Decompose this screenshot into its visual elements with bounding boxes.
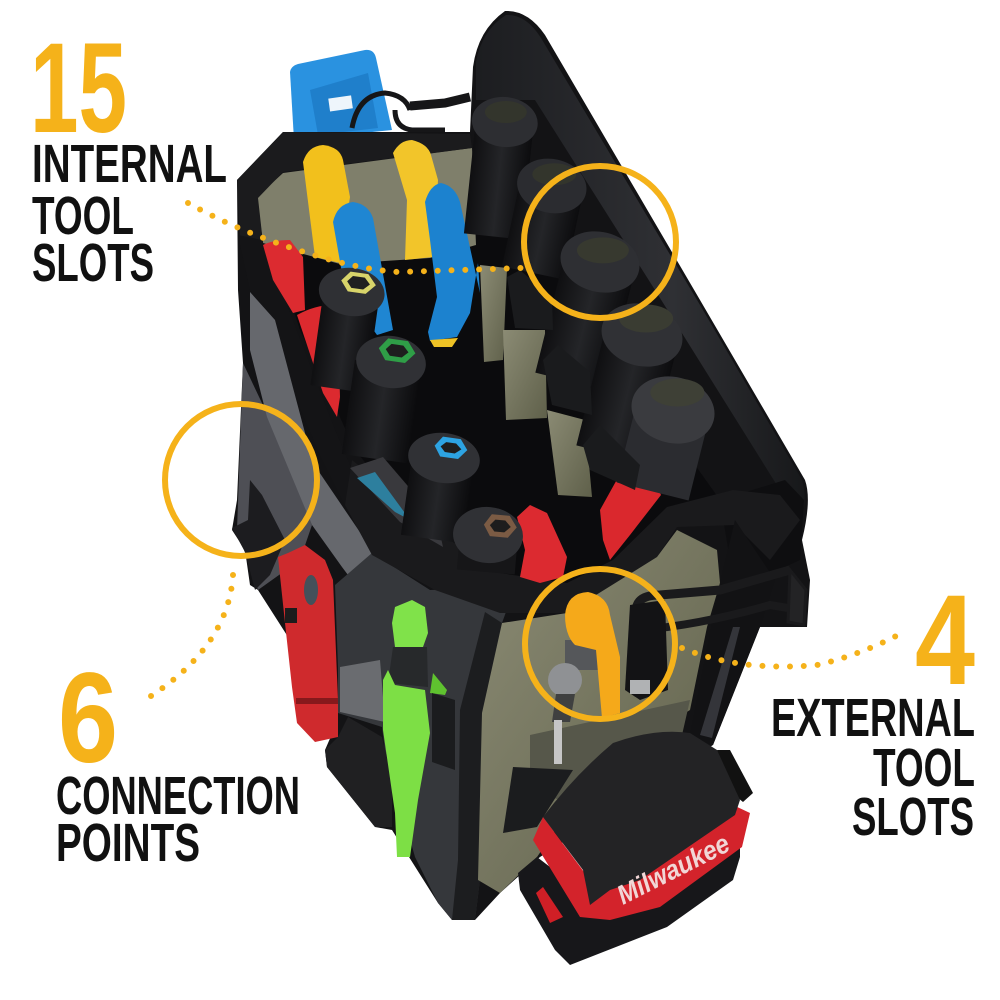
- mesh dark right band: [452, 612, 502, 920]
- top rim: [237, 132, 472, 243]
- back olive wall: [257, 148, 476, 264]
- left outer dark panel: [237, 363, 312, 590]
- olive inner pocket shade: [530, 700, 690, 800]
- interior: [258, 150, 720, 590]
- screwdriver 4: [572, 289, 691, 464]
- callout: 15 internal tool slots: TOOL: [32, 186, 134, 246]
- screwdriver 3: [531, 222, 646, 391]
- back flap: [476, 15, 805, 520]
- grey strap: [250, 292, 392, 607]
- tape side nub: [717, 750, 753, 802]
- olive tool pockets: [480, 265, 592, 497]
- icon: tape measure: [518, 732, 753, 965]
- icon: blue tool at top: [290, 50, 392, 140]
- bag body silhouette: [232, 11, 810, 920]
- screwdriver blue cap: [397, 428, 483, 544]
- screwdriver green cap: [342, 331, 429, 464]
- icon: red cutter: [278, 545, 338, 742]
- tool bag photo: [232, 11, 810, 920]
- icon: screwdrivers: [305, 94, 723, 575]
- callout: 4 external tool slots: 4: [915, 569, 975, 712]
- black pocket loops: [507, 270, 640, 490]
- icon: blue meter: [350, 457, 443, 547]
- screwdriver 1: [460, 94, 540, 240]
- callout: 6 connection points: 6: [58, 647, 118, 790]
- front mesh panel: [335, 553, 515, 920]
- screwdriver yellow cap: [305, 264, 388, 394]
- callout dots and circles: [140, 166, 898, 719]
- front lip: [345, 460, 800, 613]
- callout: 15 internal tool slots: 15: [30, 17, 127, 160]
- lower left buckle: [325, 717, 392, 827]
- icon: red handles: [263, 240, 661, 583]
- callout: 6 connection points: [56, 647, 300, 873]
- grey strap lower: [340, 660, 385, 722]
- screwdriver 2: [499, 152, 592, 280]
- screwdriver brown cap: [450, 504, 525, 575]
- flap side lower: [720, 480, 804, 590]
- callout: 6 connection points: CONNECTION: [56, 766, 300, 826]
- callout: 15 internal tool slots: INTERNAL: [32, 134, 227, 194]
- webbing strap: [503, 767, 573, 833]
- tape brand: Milwaukee: [612, 828, 734, 910]
- icon: green marker: [383, 600, 455, 857]
- tape top dome: [543, 732, 740, 905]
- carabiner right: [636, 570, 806, 630]
- icon: yellow pliers handles: [303, 140, 438, 263]
- callout: 15 internal tool slots: SLOTS: [32, 233, 154, 293]
- icon: blue pliers handles: [333, 183, 480, 347]
- black bag edge: [238, 235, 450, 570]
- tape base: [518, 830, 740, 965]
- callout: 4 external tool slots: [771, 569, 975, 847]
- upper left buckle: [232, 480, 285, 590]
- screwdriver 5: [612, 363, 723, 502]
- icon: carabiner ring and clip: [352, 93, 470, 130]
- tape red body: [533, 805, 750, 920]
- right side strips: [690, 520, 775, 745]
- tape red clip: [536, 887, 563, 923]
- icon: external pocket tools: [548, 592, 668, 764]
- callout: 15 internal tool slots: [30, 17, 227, 293]
- front olive panel: [478, 530, 720, 893]
- callout: 6 connection points: POINTS: [56, 813, 200, 873]
